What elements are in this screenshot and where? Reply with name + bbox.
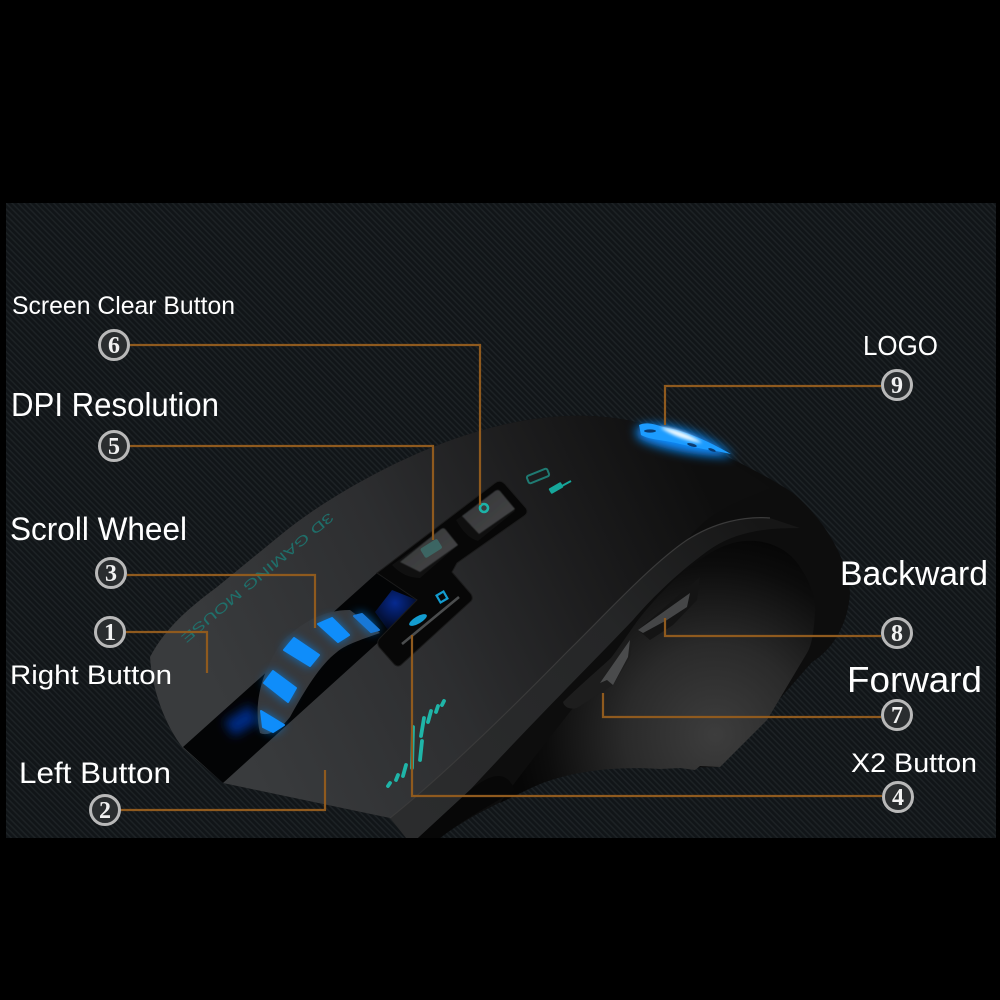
X2 button: [402, 592, 459, 644]
leader line 3: [127, 575, 315, 628]
leader line 8: [665, 618, 881, 636]
leader line 7: [603, 693, 881, 717]
badge 8: [882, 618, 912, 648]
label 4: X2 Button: [851, 748, 977, 778]
logo glow: [636, 423, 733, 456]
badge 7: 7: [891, 703, 903, 729]
decorative teal dashes: [388, 701, 444, 786]
badge 4: 4: [892, 785, 904, 811]
callout 9: logo: [665, 330, 938, 425]
badge 9: [882, 370, 912, 400]
mouse outer silhouette: [150, 416, 850, 838]
leader line 5: [130, 446, 433, 540]
badge 7: [882, 700, 912, 730]
carbon fibre panel: [6, 203, 996, 838]
callout 2: left button: [19, 757, 325, 824]
badge 1: 1: [104, 620, 116, 646]
callout 5: DPI resolution: [11, 386, 433, 540]
leader line 9: [665, 386, 881, 425]
illustration: gaming mouse: [150, 416, 850, 838]
badge 5: 5: [108, 434, 120, 460]
callout 8: backward: [665, 555, 988, 648]
label 9: LOGO: [863, 330, 938, 361]
wheel light glow: [260, 613, 380, 733]
leader line 4: [412, 635, 882, 796]
button cluster surround: [377, 481, 527, 666]
callout 6: screen clear button: [12, 292, 480, 505]
mouse model text: 3D GAMING MOUSE: [178, 510, 337, 646]
thumb grip: [500, 541, 815, 803]
logo cutouts: [644, 429, 716, 453]
wheel light segments: [261, 614, 379, 732]
callout 7: forward: [603, 659, 982, 730]
label 3: Scroll Wheel: [10, 511, 187, 547]
badge 6: 6: [108, 333, 120, 359]
status indicator icons: [526, 468, 571, 494]
backward side button: [638, 577, 700, 640]
badge 5: [100, 432, 128, 460]
callout 4: X2 button: [412, 635, 977, 812]
badge 6: [100, 330, 128, 360]
dark underside strip: [418, 776, 515, 838]
badge 8: 8: [891, 621, 903, 647]
badge 2: 2: [99, 798, 111, 824]
leader line 2: [120, 770, 325, 810]
label 8: Backward: [840, 555, 988, 593]
badge 3: [96, 558, 126, 588]
badge 2: [90, 796, 120, 824]
top shell surface: [150, 416, 770, 818]
scroll wheel: [258, 610, 380, 734]
X2 square icon: [437, 592, 447, 602]
blue slot glow: [224, 590, 417, 736]
leader line 1: [126, 632, 207, 673]
scroll wheel slot: [183, 573, 417, 783]
thin highlight line on seam: [390, 518, 770, 818]
badge 4: [884, 782, 912, 812]
badge 1: [96, 618, 124, 646]
DPI button: [392, 528, 458, 578]
label 1: Right Button: [10, 660, 172, 690]
X2 button highlight: [402, 597, 459, 644]
badge 3: 3: [105, 561, 117, 587]
label 6: Screen Clear Button: [12, 292, 235, 320]
label 2: Left Button: [19, 757, 171, 790]
power icon: [480, 504, 488, 512]
label 5: DPI Resolution: [11, 386, 219, 423]
logo highlight: [660, 427, 702, 443]
logo: [639, 423, 731, 454]
X2 mouse icon: [408, 612, 428, 628]
side seam band: [390, 518, 800, 838]
leader line 6: [130, 345, 480, 505]
callout 1: right button: [10, 618, 207, 690]
callout 3: scroll wheel: [10, 511, 315, 628]
badge 9: 9: [891, 373, 903, 399]
label 7: Forward: [847, 659, 982, 700]
DPI icon: [420, 538, 443, 558]
forward side button: [563, 637, 633, 709]
screen clear button: [456, 490, 515, 541]
